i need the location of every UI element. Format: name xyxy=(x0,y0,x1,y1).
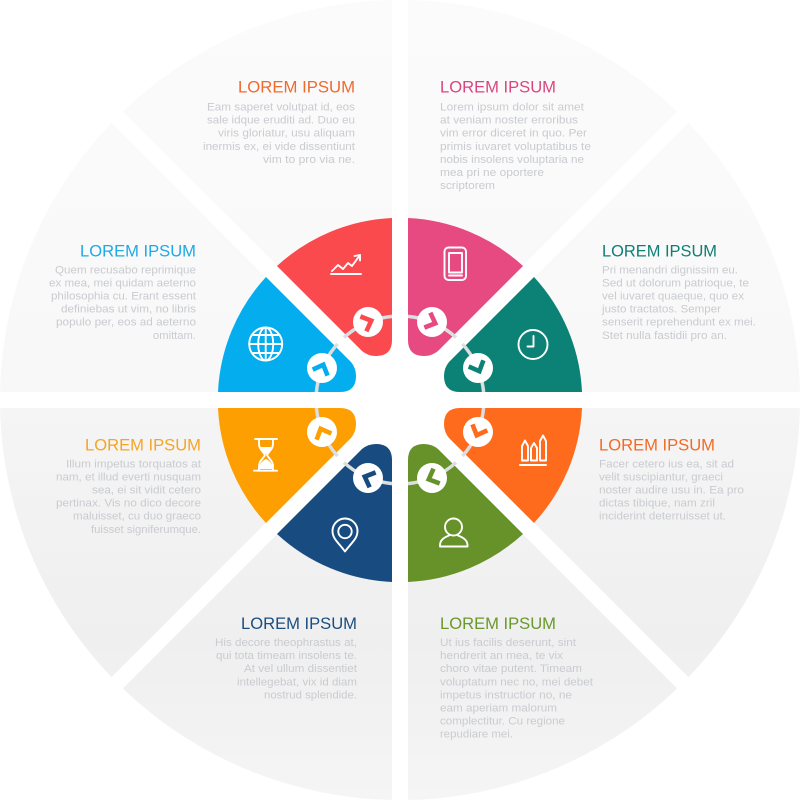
connector stubs: yellow xyxy=(316,408,338,456)
text block: top left xyxy=(203,78,356,166)
segment: yellow xyxy=(218,408,356,523)
connector stubs: teal xyxy=(462,344,484,392)
body: top left: viris gloriatur, usu aliquam xyxy=(218,128,355,140)
text block: lower right xyxy=(599,436,744,523)
heading: bottom left: LOREM IPSUM xyxy=(241,614,357,633)
icon: hourglass xyxy=(254,439,277,471)
connector stubs: navy xyxy=(344,462,392,484)
body: upper left xyxy=(49,264,197,342)
text block: bottom left xyxy=(215,614,357,701)
body: top right: nobis insolens voluptaria ne xyxy=(440,154,584,166)
body: upper right: Stet nulla fastidii pro an. xyxy=(602,330,727,342)
body: bottom right: repudiare mei. xyxy=(440,729,513,741)
body: top right: scriptorem xyxy=(440,180,495,192)
body: top left: vim to pro via ne. xyxy=(263,154,355,166)
body: top right xyxy=(440,102,591,192)
body: bottom left: intellegebat, vix id diam xyxy=(237,676,357,688)
body: lower right: noster audire usu in. Ea pro xyxy=(599,484,744,496)
body: upper right: Pri menandri dignissim eu. xyxy=(602,264,738,276)
body: lower left: sea, ei sit vidit cetero xyxy=(92,484,201,496)
connector stubs: pink xyxy=(408,316,456,338)
icon: line chart xyxy=(331,255,361,274)
heading: lower left: LOREM IPSUM xyxy=(85,436,201,455)
connector stubs: orange xyxy=(462,408,484,456)
icon: map pin xyxy=(332,518,358,552)
node: orange arrow xyxy=(463,417,493,447)
body: upper left: Quem recusabo reprimique xyxy=(55,264,196,276)
body: upper left: definiebas ut vim, no libris xyxy=(61,304,197,316)
connector stubs: blue xyxy=(316,344,338,392)
segment: blue xyxy=(218,277,356,392)
body: bottom left xyxy=(215,637,357,701)
node: teal arrow xyxy=(463,353,493,383)
body: bottom left: His decore theophrastus at, xyxy=(215,637,357,649)
node: red arrow xyxy=(353,307,383,337)
body: lower right: Facer cetero ius ea, sit ad xyxy=(599,458,734,470)
icon: clock xyxy=(518,330,548,359)
segment: navy xyxy=(277,444,392,582)
body: top right: primis iuvaret voluptatibus te xyxy=(440,141,591,153)
body: bottom right: choro vitae putent. Timeam xyxy=(440,663,582,675)
body: top right: Lorem ipsum dolor sit amet xyxy=(440,102,584,114)
node: yellow arrow xyxy=(307,417,337,447)
node: blue arrow xyxy=(307,353,337,383)
text block: top right xyxy=(440,78,591,192)
text block: upper left xyxy=(49,242,197,342)
node: navy arrow xyxy=(353,463,383,493)
heading: upper left: LOREM IPSUM xyxy=(80,242,196,261)
segment: teal xyxy=(444,277,582,392)
node: green arrow xyxy=(417,463,447,493)
node: pink arrow xyxy=(417,307,447,337)
body: bottom right: impetus instructior no, ne xyxy=(440,689,572,701)
body: upper right: Sed ut dolorum patrioque, te xyxy=(602,277,749,289)
segment: pink xyxy=(408,218,523,356)
body: upper right xyxy=(601,264,756,342)
connector stubs: red xyxy=(344,316,392,338)
body: top left: Eam saperet volutpat id, eos xyxy=(207,102,356,114)
text block: lower left xyxy=(56,436,201,536)
body: top left: sale idque eruditi ad. Duo eu xyxy=(207,115,355,127)
body: upper right: vel iuvaret quaeque, quo ex xyxy=(602,290,745,302)
body: lower right: velit suscipiantur, graeci xyxy=(599,471,723,483)
heading: lower right: LOREM IPSUM xyxy=(599,436,715,455)
body: lower left: nam, et illud everti nusquam xyxy=(56,471,201,483)
icon: globe xyxy=(249,328,282,360)
body: bottom right: complectitur. Cu regione xyxy=(440,716,565,728)
text block: bottom right xyxy=(440,614,593,741)
segment: green xyxy=(408,444,523,582)
body: lower left: maluisset, cu duo graeco xyxy=(73,511,201,523)
body: upper right: justo tractatos. Semper xyxy=(601,304,721,316)
body: top left xyxy=(203,102,356,166)
body: top right: at veniam noster erroribus xyxy=(440,115,579,127)
body: bottom right: voluptatum nec no, mei debet xyxy=(440,676,593,688)
body: lower right xyxy=(599,458,744,523)
body: top right: vim error diceret in quo. Per xyxy=(440,128,587,140)
body: upper left: philosophia cu. Erant essent xyxy=(51,290,196,302)
icon: smartphone xyxy=(444,248,466,280)
body: lower left: Illum impetus torquatos at xyxy=(66,458,201,470)
body: bottom right xyxy=(440,637,593,741)
body: upper left: populo per, eos ad aeterno xyxy=(56,317,196,329)
icon: person xyxy=(440,518,468,546)
body: bottom left: nostrud splendide. xyxy=(264,689,357,701)
body: upper right: senserit reprehendunt ex mei. xyxy=(602,317,756,329)
body: bottom left: At vel ullum dissentiet xyxy=(244,663,357,675)
segment: orange xyxy=(444,408,582,523)
heading: upper right: LOREM IPSUM xyxy=(602,242,717,261)
body: lower left xyxy=(56,458,201,536)
body: upper left: ex mea, mei quidam aeterno xyxy=(49,277,196,289)
body: lower left: fuisset signiferumque. xyxy=(91,524,201,536)
heading: top left: LOREM IPSUM xyxy=(238,78,355,96)
body: upper left: omittam. xyxy=(153,330,196,342)
heading: top right: LOREM IPSUM xyxy=(440,78,556,96)
body: lower left: pertinax. Vis no dico decore xyxy=(56,498,201,510)
connector stubs: green xyxy=(408,462,456,484)
body: bottom right: eam aperiam malorum xyxy=(440,702,557,714)
body: top right: mea pri ne oportere xyxy=(440,167,544,179)
body: bottom right: Ut ius facilis deserunt, sint xyxy=(440,637,576,649)
heading: bottom right: LOREM IPSUM xyxy=(440,614,556,633)
segment: red xyxy=(277,218,392,356)
body: lower right: dictas tibique, nam zril xyxy=(599,498,715,510)
body: bottom left: qui tota timeam insolens te. xyxy=(216,650,357,662)
text block: upper right xyxy=(601,242,756,342)
icon: bar chart xyxy=(520,436,546,465)
body: lower right: inciderint deterruisset ut. xyxy=(599,511,726,523)
body: bottom right: hendrerit an mea, te vix xyxy=(440,650,564,662)
body: top left: inermis ex, ei vide dissentiunt xyxy=(203,141,355,153)
